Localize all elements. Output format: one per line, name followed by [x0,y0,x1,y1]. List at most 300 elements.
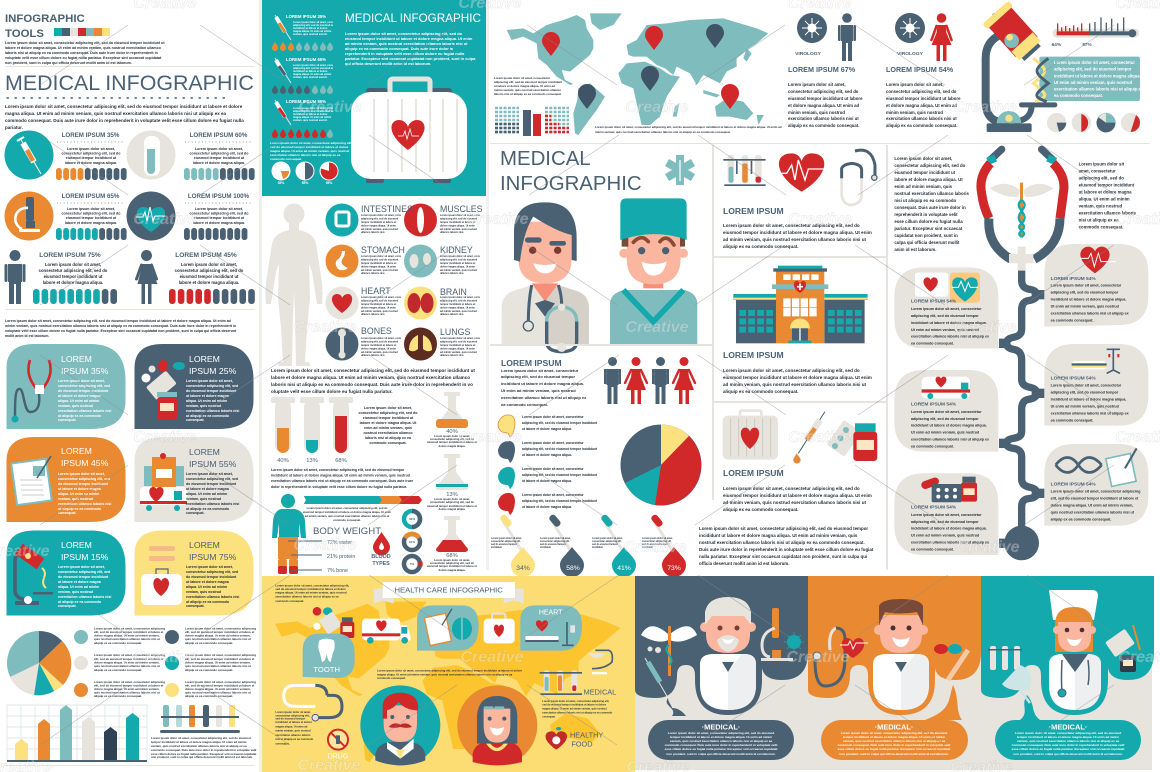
character [1049,590,1101,710]
organ descriptions: adipiscing elit, sed do eiusmod [440,258,478,262]
drops [272,42,333,51]
icon: big stethoscope and caduceus: pariatur. Excepteur sint occaecat [894,226,963,231]
panel: stethoscope timeline: ea commodo consequat. [1051,418,1094,422]
panel: virology woman 54%: minim veniam, quis nostrud [886,110,943,115]
pie chart: left column [7,631,71,695]
panel: health care infographic [262,576,635,772]
text: body weight intro: incididunt ut labore et dolore magna aliqua. Ut enim ad minim veniam, quis nostrud [271,474,410,478]
text: lorem ipsum lab: Lorem ipsum dolor sit amet, consectetur adipiscing elit, sed do [723,223,860,228]
panel: senior doctor [635,576,808,760]
panel: stethoscope timeline: incididunt ut labore et dolore magna aliqua. [911,527,987,531]
panel: stethoscope 35%: ut aliquip ex ea commodo [58,414,101,418]
organ descriptions: adipiscing elit, sed do eiusmod [361,300,399,302]
organ descriptions: Lorem ipsum dolor sit amet, cons [361,214,402,217]
text: stethoscope: exercitation ullamco laboris [275,733,311,737]
panel: medical characters background [635,576,1152,770]
panel: stethoscope 35%: exercitation ullamco laboris nisi [58,409,111,413]
panel: hospital 55%: Lorem ipsum dolor sit amet, [186,472,233,476]
pill: medical text: non proident, sunt in culpa qui officia deserunt mollit anim id est laborum. [666,752,776,756]
text: lorem ipsum lab: LOREM IPSUM [723,206,784,216]
drops [272,129,333,138]
organ labels: HEART [361,286,391,296]
panel: medicine 25%: Lorem ipsum dolor sit amet, [186,379,233,383]
icon: virus [895,13,925,43]
text: lorem ipsum lab: aliquip ex ea commodo consequat. [723,244,799,249]
watermark: Creative Market: Creative [623,539,687,556]
legend: pie chart: aliquip ex ea commodo consequat. [94,694,142,698]
panel: stethoscope timeline: exercitation ullamco laboris nisi ut aliquip ex [911,335,989,339]
pill gauge [56,168,127,180]
panel: clipboard 45%: veniam, quis nostrud [58,497,93,501]
pill: medical text: tempor incididunt ut labore et dolore magna aliqua. Ut enim ad minim [670,735,772,739]
panel: virology man 67%: Lorem ipsum dolor sit amet, [788,82,846,87]
stat: heartbeat 100% [126,192,253,240]
organ: kidney [404,244,437,278]
organ descriptions: Lorem ipsum dolor sit amet, cons [361,296,402,299]
panel: medical case 75%: ut labore et dolore magna [186,580,229,584]
legend: pie chart: elit, sed do eiusmod tempor incididunt ut labore et [185,684,254,688]
icon: test tube rack [160,705,240,733]
arrow bar [304,496,422,504]
panel: clipboard 45%: do eiusmod tempor incididunt [58,482,109,486]
text: map left: laboris nisi ut aliquip ex ea commodo consequat. [494,92,562,96]
panel: medical case 75%: consectetur adipiscing elit, sed [186,570,238,574]
stat: test tube 60% [126,130,255,180]
panel: lab tools [723,150,877,205]
icon: heartbeat [126,192,176,240]
legend: pie chart: dolore magna aliqua. Ut enim ad minim veniam, [94,687,160,691]
panel: medicine 25%: ut aliquip ex ea commodo [186,414,229,418]
text: left column note: Lorem ipsum dolor sit amet, consectetur adipiscing elit, sed do eiusmod tempor incididunt ut labore et dolore magna aliqua. Ut enim ad [5,319,231,323]
text: lorem ipsum kit: eiusmod tempor incididunt ut labore et dolore magna aliqua. Ut enim [723,493,872,498]
panel: stethoscope timeline: exercitation ullamco laboris nisi ut aliquip ex [1051,312,1129,316]
panel: clipboard 45%: Lorem ipsum dolor sit amet, [58,472,105,476]
chart: body weight figure [272,494,422,574]
text: stethoscope: minim veniam, quis nostrud [275,729,311,733]
stat: heartbeat 100%: eiusmod tempor incididunt ut [194,216,245,220]
stat: syringe 35% [4,130,127,180]
panel: virology man 67%: eiusmod tempor incididunt ut labore [788,96,863,101]
organ descriptions: dolore magna aliqua. Ut enim [440,348,476,350]
bubble: heart: HEART [539,610,563,617]
legend: pie chart: Lorem ipsum dolor sit amet, consectetur adipiscing [185,680,256,684]
map land [507,13,768,135]
organ descriptions: ullamco laboris nisi. [361,231,385,234]
pill gauge [184,228,247,240]
panel: stethoscope 35%: veniam, quis nostrud [58,404,93,408]
panel: virology woman 54%: exercitation ullamco laboris nisi ut [886,116,957,121]
organ descriptions: ullamco laboris nisi. [361,354,385,357]
stat: syringe 35%: LOREM IPSUM 35% [62,132,120,139]
panel: medicine 25%: consectetur adipiscing elit, sed [186,384,238,388]
icon: big stethoscope and caduceus: consequat. Duis aute irure dolor in [894,205,966,210]
panel: microscope 15%: exercitation ullamco laboris nisi [58,595,111,599]
droppers with percentages: 58% [566,565,580,572]
panel: medicine 25%: ut labore et dolore magna [186,394,229,398]
illustration: doctor man [502,202,589,352]
organ descriptions: ad minim veniam, quis nostrud [440,228,477,231]
organ descriptions: ullamco laboris nisi. [361,272,385,275]
stat: orange syringe 35%: Lorem ipsum dolor sit amet, cons [293,21,334,24]
organ descriptions: tempor incididunt ut labore et [361,221,396,224]
panel: stethoscope timeline: incididunt ut labore et dolore magna aliqua. [911,424,987,428]
chart: body weight figure: 7% bone [327,568,348,574]
panel: people and pie: LOREM IPSUM [501,358,562,368]
donut charts: 33% [409,517,415,521]
organ descriptions: ad minim veniam, quis nostrud [440,310,477,313]
pin markers [542,24,739,109]
icon: big stethoscope and caduceus: reprehenderit in voluptate velit [894,212,958,217]
chart: body weight figure: 21% protein [327,554,355,560]
heading: infographic tools: INFOGRAPHIC [5,13,85,25]
icon: pills [313,607,354,638]
panel: medical case 75%: ut aliquip ex ea commodo [186,600,229,604]
panel: infographic tools [5,13,165,65]
organ descriptions: ullamco laboris nisi. [440,231,464,234]
panel: clipboard 45% [6,437,126,522]
title: medical infographic centre: MEDICAL [500,148,591,170]
icon: hospital and ambulance [140,453,187,511]
pill: medical text [995,720,1141,760]
panel: stethoscope 35%: consequat. [58,418,77,422]
panel: medical case 75%: aliqua. Ut enim ad minim [186,585,227,589]
donut charts: 31% [409,540,415,544]
organ: stomach [326,244,358,278]
stat: woman 45%: LOREM IPSUM 45% [175,252,237,259]
text: stethoscope: incididunt ut labore et dolore [275,720,312,724]
panel: medicine 25%: LOREM [189,354,220,364]
icon: stethoscope and heart [813,628,868,686]
text: lower paragraph: nulla pariatur. Excepteur sint occaecat cupidatat non proident, sunt in culpa qui [699,554,867,559]
panel: microscope 15% [6,530,126,616]
text: stethoscope: nisi ut aliquip ex ea commodo [275,737,314,741]
mini pie charts: 65% [302,181,308,185]
stat: heartbeat 100%: labore et dolore magna aliqua. [193,221,245,225]
organ labels: INTESTINES [361,204,413,214]
watermark: Creative Market: Creative [788,211,852,228]
droppers with percentages: Lorem ipsum dolor sit amet, [642,537,673,540]
chart: body weight figure: 72% water [327,540,352,546]
legend: pie chart: Lorem ipsum dolor sit amet, consectetur adipiscing [185,626,256,630]
text: body paragraph: oluptate velit esse cillum dolore eu fugiat nulla pariatur. [271,389,393,394]
organ: heart [326,286,358,320]
label: healthy food: HEALTHY [570,731,603,740]
panel: stethoscope timeline: Ut enim ad minim veniam, quis nostrud [911,328,979,332]
bubbles legend: adipiscing elit, sed do eiusmod tempor incididunt [522,473,598,477]
legend: pie chart: quis nostrud exercitation ullamco laboris nisi ut [185,664,251,668]
panel: people and pie: ea commodo consequat. [501,402,548,407]
gauge chart [1052,17,1139,47]
bubbles legend: Lorem ipsum dolor sit amet, consectetur [522,493,584,497]
text: teal panel note: exercitation ullamco laboris nisi ut aliquip ex ea [270,153,341,157]
icon: capsule and dropper [934,644,968,680]
panel: stethoscope timeline: dolore magna aliqua. Ut enim ad minim veniam, [1051,503,1133,507]
chart: body weight figure: BODY WEIGHT [313,526,381,537]
panel: male doctor [808,576,981,760]
panel: stethoscope timeline: ea commodo consequat. [911,342,954,346]
icon: pills and jar [1105,625,1140,672]
watermark: Creative Market: Creative [460,649,524,666]
text: body paragraph: labore et dolore magna aliqua. Ut enim ad minim veniam, quis nostrud exercitation ullamco [271,375,470,380]
droppers with percentages: incididunt [592,546,603,549]
text: center: Lorem ipsum dolor sit amet, consectetur adipiscing elit, sed do eiusmod tempor incididunt ut labore et dolore [377,669,523,673]
text: top left: magna aliqua. Ut enim ad minim veniam, quis nostrud [275,591,347,595]
text: lorem ipsum lab [723,206,872,249]
legend: pie chart: aliquip ex ea commodo consequat. [94,668,142,672]
organ descriptions: ad minim veniam, quis nostrud [361,310,398,313]
icon: blood types [371,532,391,567]
panel: clipboard 45%: exercitation ullamco laboris nisi [58,502,111,506]
organ descriptions: ullamco laboris nisi. [361,313,385,316]
chart: flasks: eiusmod tempor incididunt ut labore et [427,440,477,444]
text: stethoscope: Lorem ipsum dolor sit amet, [275,710,311,714]
watermark: Creative Market: Creative [953,319,1017,336]
text: map left: adipiscing elit, sed do eiusmod tempor incididunt [494,80,562,84]
panel: stethoscope timeline: Ut enim ad minim veniam, quis nostrud [1051,305,1119,309]
text: tools description: laboris nisi ut aliquip ex ea commodo consequat. Duis aute irure dolor in reprehenderit in [5,51,158,55]
droppers with percentages: sed do eiusmod tempor [540,543,566,546]
panel: virology woman 54%: LOREM IPSUM 54% [886,65,954,74]
legend: pie chart: aliquip ex ea commodo consequat. [185,641,233,645]
caduceus [990,183,1053,238]
panel: clipboard 45%: consectetur adipiscing elit, sed [58,477,110,481]
stat: heartbeat 100%: LOREM IPSUM 100% [188,193,250,200]
stat: orange syringe 35% [272,14,334,51]
stat: test tube 60%: LOREM IPSUM 60% [190,132,248,139]
bubbles legend: adipiscing elit, sed do eiusmod tempor incididunt [522,421,598,425]
organ descriptions: Lorem ipsum dolor sit amet, cons [440,337,481,340]
panel: hospital 55%: LOREM [189,447,220,457]
pill gauge [184,168,255,180]
stat: orange syringe 35%: veniam, quis nostrud exercit. [293,33,328,36]
stat: heartbeat 100%: Lorem ipsum dolor sit amet, [195,207,243,211]
panel: virology man 67%: consectetur adipiscing elit, sed do [788,89,859,94]
panel: microscope and gauge: adipiscing elit, sed do eiusmod tempor [1054,67,1132,72]
panel: stethoscope timeline: Lorem ipsum dolor sit amet, consectetur [911,307,982,311]
stat: man 75%: eiusmod tempor incididunt ut [44,274,103,279]
mini dot bar chart [495,108,569,136]
pill: medical text: esse cillum dolore eu fugiat nulla pariatur. Excepteur sint occaecat cupidatat [665,747,777,751]
watermark: Creative Market: Creative [465,211,529,228]
legend: pie chart: quis nostrud exercitation ullamco laboris nisi ut [185,690,251,694]
text: test tube description: eiusmod tempor incididunt ut [363,416,414,420]
panel: clipboard 45%: aliqua. Ut enim ad minim [58,492,99,496]
bubbles legend: Lorem ipsum dolor sit amet, consectetur [522,441,584,445]
legend: pie chart: aliquip ex ea commodo consequat. [185,694,233,698]
stat: slate syringe 65%: Lorem ipsum dolor sit amet, cons [293,64,334,67]
chart: test tubes: 68% [335,458,347,464]
bubble labels: LOREM IPSUM 54% [911,298,957,304]
bubble labels: LOREM IPSUM 54% [1051,276,1096,282]
panel: people and pie: Lorem ipsum dolor sit amet, consectetur [501,368,579,373]
icon: big stethoscope and caduceus: esse cillum dolore eu fugiat nulla [894,219,963,224]
panel: medicine 25%: IPSUM 25% [189,366,237,376]
panel: medicine 25%: do eiusmod tempor incididunt [186,389,237,393]
droppers with percentages: consectetur adipiscing elit, [642,540,672,543]
icon: big stethoscope and caduceus: enim ad minim veniam, quis [894,184,953,189]
stat: man 75%: Lorem ipsum dolor sit amet, [45,262,101,267]
text: teal panel paragraph: reprehenderit in voluptate velit esse cillum dolore eu fugiat nulla [345,51,465,56]
organ descriptions: tempor incididunt ut labore et [440,221,475,224]
icon: big stethoscope and caduceus: commodo consequat. [1079,225,1123,230]
icon: woman [136,250,158,304]
chart: flasks [427,392,477,572]
organ descriptions: ullamco laboris nisi. [440,354,464,357]
pill gauge [169,289,255,304]
watermark: Creative Market: Creative [458,429,522,446]
icon: big stethoscope and caduceus: eiusmod tempor incididunt ut [894,170,956,175]
stat: microscope 65%: labore et dolore magna aliqua. [65,221,117,225]
organ descriptions: adipiscing elit, sed do eiusmod [440,340,478,344]
text: teal panel note: sed do eiusmod tempor incididunt ut labore et dolore [270,145,349,149]
text: tools description: voluptate velit esse cillum dolore eu fugiat nulla pariatur. Excepteur sint occaecat cupidatat [5,56,162,60]
droppers with percentages: Lorem ipsum dolor sit amet, [592,537,623,540]
text: tools description: labore et dolore magna aliqua. Ut enim ad minim veniam, quis nostrud exercitation ullamco [5,46,162,50]
text: tools description: non proident, sunt in culpa qui officia deserunt mollit anim id est laborum. [5,61,132,65]
text: body weight intro: exercitation ullamco laboris nisi ut aliquip ex ea commodo consequat. Duis aute irure [271,479,413,483]
panel: stethoscope 35% [6,344,126,429]
bubbles legend: Lorem ipsum dolor sit amet, consectetur [522,467,584,471]
panel: stethoscope timeline: ea commodo consequat. [1051,319,1094,323]
text: teal panel paragraph: pariatur. Excepteur sint occaecat cupidatat non proident, sunt in culpa [345,56,476,61]
icon: big stethoscope and caduceus: nostrud exercitation ullamco laboris [894,191,969,196]
text: teal panel note: Lorem ipsum dolor sit amet, consectetur adipiscing elit, [270,141,352,145]
text: lorem ipsum kit: LOREM IPSUM [723,468,784,478]
panel: clipboard 45%: ut aliquip ex ea commodo [58,507,101,511]
bubbles legend: Lorem ipsum dolor sit amet, consectetur [522,415,584,419]
icon: big stethoscope and caduceus: nisi ut aliquip ex ea commodo [894,198,956,203]
stat: slate syringe 65%: incididunt ut labore et dolore [293,70,328,73]
stat: heartbeat 100%: consectetur adipiscing elit, sed do [190,212,249,216]
panel: stethoscope 35%: IPSUM 35% [61,366,109,376]
panel: medical case 75%: do eiusmod tempor incididunt [186,575,237,579]
legend: pie chart: Lorem ipsum dolor sit amet, consectetur adipiscing [94,680,165,684]
panel: microscope and gauge: exercitation ullamco laboris nisi ut aliquip ex [1054,86,1144,91]
bubbles legend: ut labore et dolore magna aliqua. [522,479,572,483]
pill: medical text: Lorem ipsum dolor sit amet, consectetur adipiscing elit, sed do eiusmod [841,731,947,735]
organ descriptions: ad minim veniam, quis nostrud [440,269,477,272]
stat: slate syringe 65%: magna aliqua. Ut enim ad minim [293,73,332,76]
character [700,597,756,710]
text: test tube description: nostrud exercitation ullamco [363,431,413,435]
panel: medicine 25% [134,344,254,429]
panel: stethoscope timeline: exercitation ullamco laboris nisi ut aliquip ex [911,438,989,442]
chart: flasks: eiusmod tempor incididunt ut labore et [427,564,477,568]
panel: clipboard 45%: consequat. [58,511,77,515]
chart: flasks: Lorem ipsum dolor sit amet, [434,558,470,562]
icon: pills and jar [142,360,185,420]
bubble labels: LOREM IPSUM 54% [911,505,957,511]
watermark: Creative Market: Creative [956,539,1020,556]
panel: medical case 75%: consequat. [186,604,205,608]
label: healthy food: FOOD [571,740,593,749]
bubbles legend: ut labore et dolore magna aliqua. [522,505,572,509]
stat: man 75%: LOREM IPSUM 75% [39,252,101,259]
pill: medical text: ·MEDICAL· [702,722,740,732]
banner [374,582,524,604]
organ descriptions: tempor incididunt ut labore et [440,303,475,306]
panel: stethoscope 35%: ut labore et dolore magna [58,394,101,398]
icon: big stethoscope and caduceus: consectetur adipiscing elit, sed do [894,163,966,168]
organ descriptions: ullamco laboris nisi. [440,272,464,275]
panel: clipboard 45%: ut labore et dolore magna [58,487,101,491]
stat: woman 45% [136,250,255,304]
text: top left: commodo consequat. [275,599,304,603]
stat: red syringe 95%: magna aliqua. Ut enim ad minim [293,116,332,119]
panel: stethoscope timeline: ea commodo consequat. [911,445,954,449]
droppers with percentages [491,513,686,577]
panel: microscope 15%: IPSUM 15% [61,552,109,562]
stat: syringe 35%: labore et dolore magna aliqua. [65,161,117,165]
panel: stethoscope timeline: adipiscing elit, sed do eiusmod tempor [911,314,979,318]
text: test tube description: Lorem ipsum dolor sit amet, [364,406,412,410]
panel: microscope 15%: consequat. [58,604,77,608]
droppers with percentages: sed do eiusmod tempor [642,543,668,546]
legend: pie chart: quis nostrud exercitation ullamco laboris nisi ut [94,690,160,694]
panel: stethoscope timeline: Lorem ipsum dolor sit amet, consectetur adipiscing [1051,489,1140,493]
organ labels: BRAIN [440,287,467,297]
chart: flasks: consectetur adipiscing elit, sed do [430,437,474,441]
organ: muscles [404,204,437,236]
panel: microscope and gauge: Ut enim ad minim veniam, quis nostrud [1054,80,1133,85]
organ labels: BONES [361,326,392,336]
text: lorem ipsum kit: ad minim veniam, quis nostrud exercitation ullamco laboris nisi ut [723,500,866,505]
text: teal panel paragraph: ad minim veniam, quis nostrud exercitation ullamco laboris nisi ut [345,41,468,46]
organ descriptions: dolore magna aliqua. Ut enim [440,306,476,310]
stat: woman 45%: labore et dolore magna aliqua. [179,280,239,285]
stat: syringe 35%: Lorem ipsum dolor sit amet, [67,147,115,151]
stat: test tube 60%: consectetur adipiscing elit, sed do [190,152,249,156]
droppers with percentages: sed do eiusmod tempor [491,543,517,546]
pill: medical text: esse cillum dolore eu fugiat nulla pariatur. Excepteur sint occaecat cupidatat [1012,747,1124,751]
colour swatches [54,28,110,36]
icon: microscope and DNA [15,544,53,605]
chart: flasks: consectetur adipiscing elit, sed do [430,500,474,504]
panel: microscope 15%: LOREM [61,540,92,550]
watermark: Creative Market: Creative [625,99,689,116]
text: teal panel note: magna aliqua. Ut enim ad minim veniam, quis nostrud [270,149,349,153]
pill: medical text: tempor incididunt ut labore et dolore magna aliqua. Ut enim ad minim [843,735,945,739]
panel: nurse [981,576,1154,760]
text: test tube description: commodo consequat. [369,441,407,445]
world map: pins [494,13,782,136]
pill: medical text: Lorem ipsum dolor sit amet, consectetur adipiscing elit, sed do eiusmod [1015,731,1121,735]
bubble: tooth [303,634,355,678]
panel: people and pie: adipiscing elit, sed do eiusmod tempor [501,374,575,379]
bubble labels: LOREM IPSUM 54% [1051,375,1096,381]
text: top left: sed do eiusmod tempor incididunt ut labore et dolore [275,587,346,591]
panel: stethoscope timeline: Ut enim ad minim veniam, quis nostrud [1051,404,1119,408]
stat: syringe 35%: eiusmod tempor incididunt ut [66,156,117,160]
text: lorem ipsum hospital: ad minim veniam, quis nostrud exercitation ullamco laboris nisi ut [723,382,866,387]
panel: virology man 67%: LOREM IPSUM 67% [788,65,856,74]
legend: pie chart: elit, sed do eiusmod tempor incididunt ut labore et [185,630,254,634]
legend: pie chart: dolore magna aliqua. Ut enim ad minim veniam, [185,687,251,691]
watermark: Creative Market: Creative [953,99,1017,116]
organ descriptions: tempor incididunt ut labore et [361,303,396,306]
legend: pie chart: elit, sed do eiusmod tempor incididunt ut labore et [94,657,163,661]
icon: big stethoscope and caduceus: culpa qui officia deserunt mollit [894,240,960,245]
icon: big stethoscope and caduceus: Lorem ipsum dolor sit [1079,162,1125,167]
bubble: clipboard and brain [417,605,479,651]
chart: flasks: 40% [446,429,458,435]
panel: people and pie: exercitation ullamco laboris nisi ut aliquip ex [501,395,587,400]
organ descriptions: adipiscing elit, sed do eiusmod [361,258,399,262]
icon: test tubes and bowl [540,650,612,695]
panel: microscope 15%: aliqua. Ut enim ad minim [58,585,99,589]
panel: medical case 75%: IPSUM 75% [189,552,237,562]
icon: big stethoscope and caduceus: adipiscing elit, sed do [1079,176,1124,181]
